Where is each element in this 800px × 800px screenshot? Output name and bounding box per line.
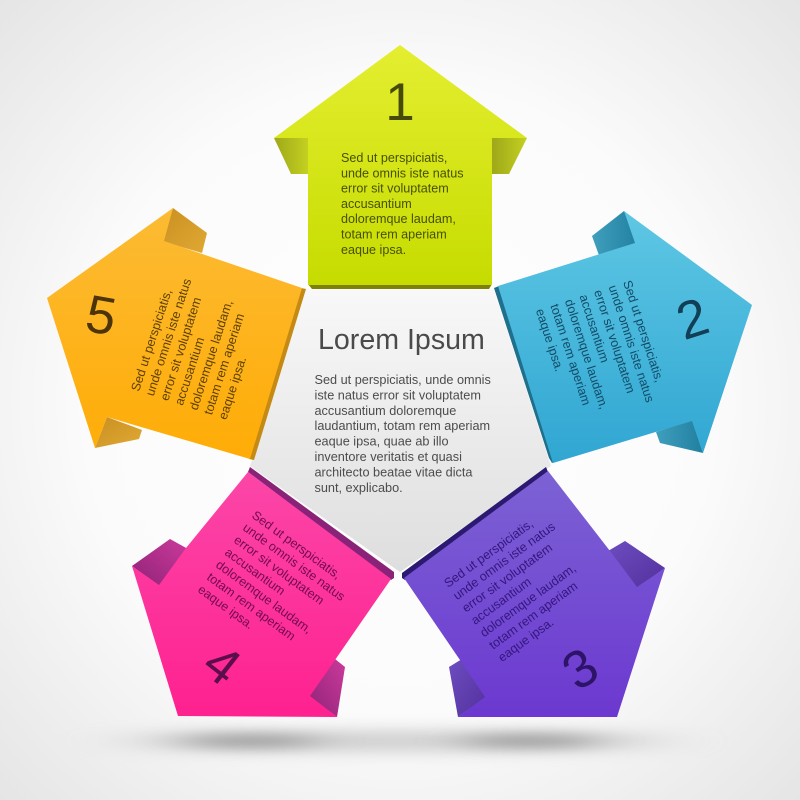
- text block 5: eaque ipsa.: [216, 355, 249, 421]
- text block 1: accusantium: [341, 197, 412, 211]
- text block 3: Sed ut perspiciatis,: [442, 517, 536, 590]
- edge: [402, 467, 548, 580]
- center text block: sunt, explicabo.: [314, 481, 403, 495]
- number 5: 5: [81, 284, 121, 347]
- center text block: iste natus error sit voluptatem: [314, 388, 481, 402]
- text block 4: error sit voluptatem: [231, 533, 327, 608]
- body: [498, 211, 752, 463]
- text block 1: error sit voluptatem: [341, 182, 449, 196]
- text block 2: Sed ut perspiciatis,: [620, 279, 666, 384]
- fold flaps: [274, 138, 527, 174]
- body: [274, 45, 527, 285]
- text block 4: eaque ipsa.: [195, 582, 256, 632]
- panel 2: blue: [494, 211, 752, 463]
- text block 2: eaque ipsa.: [533, 307, 566, 373]
- center heading: Lorem Ipsum: [318, 324, 485, 356]
- body: [47, 208, 302, 459]
- text block 4: accusantium: [222, 545, 288, 598]
- text block 4: Sed ut perspiciatis,: [249, 508, 344, 582]
- number 4: 4: [192, 633, 252, 698]
- text block 2: unde omnis iste natus: [606, 283, 657, 404]
- center text block: architecto beatae vitae dicta: [314, 465, 473, 479]
- text block 3: eaque ipsa.: [495, 615, 556, 665]
- text block 3: error sit voluptatem: [460, 540, 555, 615]
- text block 1: doloremque laudam,: [341, 212, 456, 226]
- center text block: accusantium doloremque: [314, 404, 456, 418]
- center text block: eaque ipsa, quae ab illo: [314, 435, 449, 449]
- text block 1: Sed ut perspiciatis,: [341, 151, 447, 165]
- text block 1: unde omnis iste natus: [341, 166, 464, 180]
- body: [404, 471, 665, 717]
- panel 3: violet: [402, 467, 665, 717]
- text block 4: unde omnis iste natus: [240, 520, 348, 604]
- text block 5: accusantium: [172, 336, 207, 407]
- text block 5: unde omnis iste natus: [143, 277, 194, 398]
- edge: [308, 284, 492, 289]
- text block 4: doloremque laudam,: [213, 558, 314, 636]
- fold flaps: [132, 539, 345, 717]
- edge: [248, 467, 394, 580]
- text block 4: totam rem aperiam: [204, 570, 298, 643]
- center text block: laudantium, totam rem aperiam: [314, 419, 490, 433]
- text block 1: totam rem aperiam: [341, 228, 447, 242]
- text block 5: error sit voluptatem: [158, 296, 204, 402]
- panel 4: pink: [132, 467, 394, 717]
- edge: [494, 286, 556, 463]
- number 1: 1: [385, 73, 415, 132]
- text block 5: Sed ut perspiciatis,: [129, 287, 175, 393]
- fold flaps: [592, 211, 703, 453]
- text block 2: doloremque laudam,: [562, 298, 611, 411]
- center text block: Sed ut perspiciatis, unde omnis: [314, 373, 491, 387]
- text block 2: totam rem aperiam: [547, 302, 593, 407]
- body: [132, 472, 391, 717]
- panel: center pentagon: [250, 290, 551, 572]
- text block 2: error sit voluptatem: [591, 288, 638, 395]
- number 2: 2: [669, 287, 716, 352]
- text block 5: totam rem aperiam: [201, 312, 247, 417]
- text block 2: accusantium: [576, 293, 612, 364]
- text block 3: totam rem aperiam: [486, 579, 580, 652]
- ground shadow: [115, 731, 675, 751]
- panel 1: lime: [274, 45, 527, 289]
- text block 3: doloremque laudam,: [478, 561, 579, 640]
- text block 1: eaque ipsa.: [341, 243, 406, 257]
- center text block: inventore veritatis et quasi: [314, 450, 462, 464]
- number 3: 3: [552, 637, 609, 702]
- text block 3: unde omnis iste natus: [451, 519, 558, 603]
- text block 3: accusantium: [469, 575, 534, 628]
- fold flaps: [449, 541, 665, 717]
- edge: [249, 288, 306, 460]
- fold flaps: [95, 208, 207, 448]
- center pentagon shape: [250, 290, 551, 572]
- panel 5: orange: [47, 208, 306, 460]
- text block 5: doloremque laudam,: [187, 298, 236, 412]
